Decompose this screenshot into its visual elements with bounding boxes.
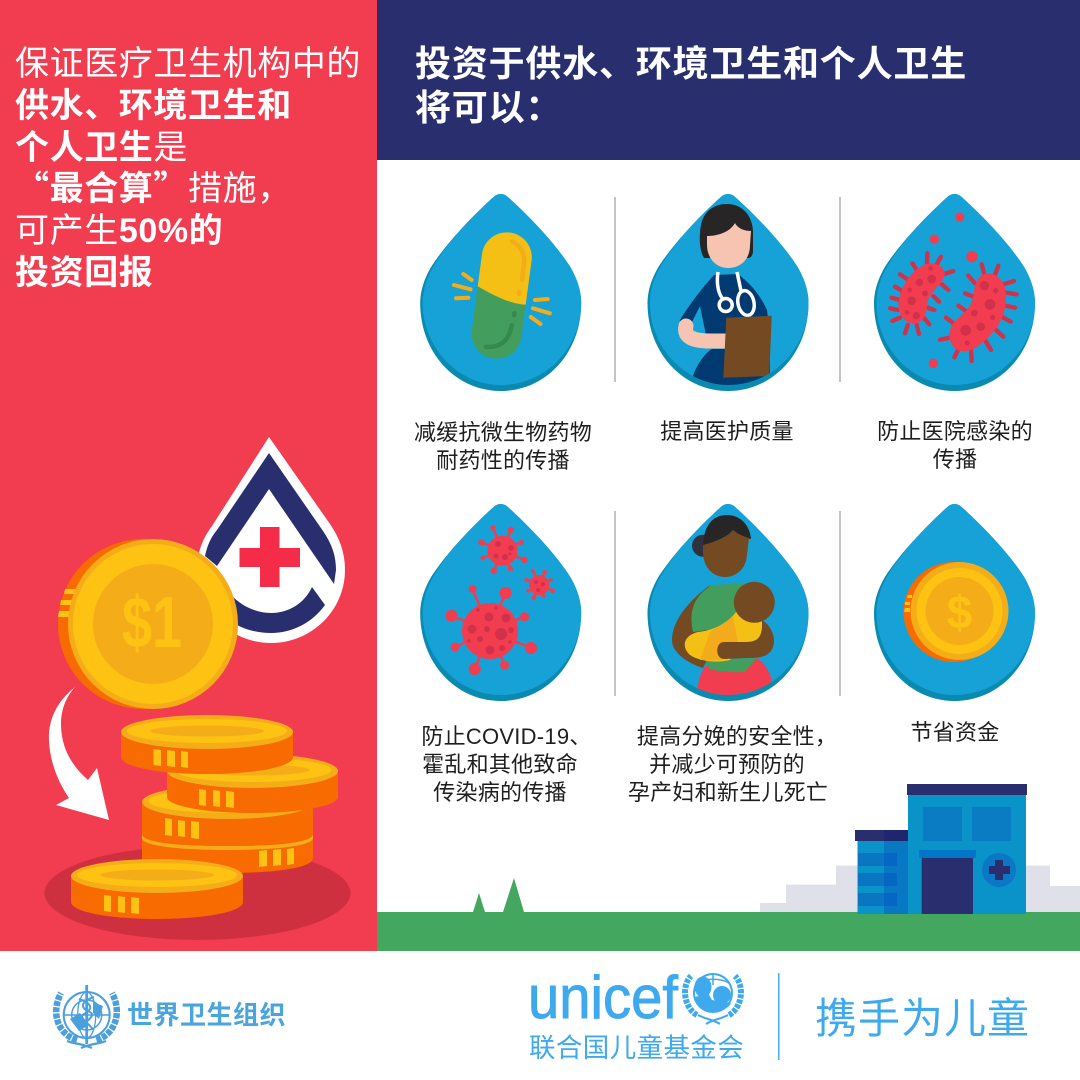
label: COVID-19 and infectious disease bbox=[421, 724, 592, 805]
icon: mother holding baby bbox=[672, 515, 775, 705]
WHO name: 世界卫生组织 bbox=[127, 1000, 286, 1030]
panel: virus droplet bbox=[420, 504, 581, 701]
icon: white curved arrow bbox=[49, 687, 109, 820]
WHO logo bbox=[56, 985, 286, 1048]
right title bbox=[415, 43, 967, 128]
panel: mother and baby droplet bbox=[648, 504, 808, 705]
label: hospital infection bbox=[877, 419, 1033, 472]
divider bbox=[614, 511, 616, 696]
label: antimicrobial resistance: 减缓抗微生物药物 bbox=[414, 420, 592, 445]
panel: pill droplet bbox=[420, 194, 581, 391]
icon: dollar coin bbox=[904, 562, 1008, 662]
panel: bacteria droplet bbox=[874, 194, 1035, 391]
UNICEF name: 联合国儿童基金会 bbox=[529, 1033, 744, 1063]
left heading text: 投资回报 bbox=[15, 254, 153, 292]
label: hospital infection: 传播 bbox=[933, 447, 977, 472]
icon: nurse bbox=[680, 204, 772, 392]
icon: capsule bbox=[469, 229, 535, 362]
right title: 投资于供水、环境卫生和个人卫生 bbox=[415, 43, 967, 84]
left heading text: 可产生50%的 bbox=[15, 212, 223, 250]
icon: big one dollar coin: $1 bbox=[122, 583, 182, 663]
label: COVID-19 and infectious disease: 传染病的传播 bbox=[433, 780, 567, 805]
icon: bacteria bbox=[890, 212, 1017, 368]
left heading text bbox=[15, 45, 361, 292]
icon: UNICEF emblem bbox=[685, 974, 741, 1024]
ground bbox=[377, 912, 1080, 951]
icon: WHO emblem bbox=[56, 985, 117, 1048]
label: COVID-19 and infectious disease: 防止COVID-19、 bbox=[421, 724, 592, 749]
right title: 将可以： bbox=[415, 87, 562, 128]
label: COVID-19 and infectious disease: 霍乱和其他致命 bbox=[422, 752, 578, 777]
footer divider bbox=[778, 973, 780, 1060]
panel: saving money droplet bbox=[874, 504, 1035, 701]
icon: dollar coin: $ bbox=[947, 586, 972, 638]
divider bbox=[839, 511, 841, 696]
illustration: coins, logo and arrow bbox=[44, 437, 350, 940]
label: safer childbirth: 并减少可预防的 bbox=[649, 752, 805, 777]
icon: coin stack bbox=[71, 715, 338, 919]
panel: left red column bbox=[0, 0, 377, 951]
divider bbox=[839, 197, 841, 382]
divider bbox=[614, 197, 616, 382]
label: save money: 节省资金 bbox=[910, 720, 1000, 745]
label: quality of care: 提高医护质量 bbox=[660, 419, 794, 444]
label: safer childbirth: 提高分娩的安全性， bbox=[637, 724, 837, 749]
grass tufts bbox=[473, 878, 524, 912]
left heading text: “最合算”措施， bbox=[15, 161, 292, 210]
label: hospital infection: 防止医院感染的 bbox=[877, 419, 1033, 444]
background skyline steps bbox=[760, 866, 1080, 912]
UNICEF logo bbox=[528, 964, 744, 1063]
icon: hospital building bbox=[855, 784, 1027, 914]
ground shadow bbox=[44, 846, 350, 940]
label: safer childbirth: 孕产妇和新生儿死亡 bbox=[628, 780, 828, 805]
icon: big one dollar coin bbox=[58, 539, 238, 709]
label: antimicrobial resistance bbox=[414, 420, 592, 473]
hospital scene bbox=[377, 784, 1080, 951]
left heading text: 供水、环境卫生和 bbox=[15, 87, 292, 125]
label: antimicrobial resistance: 耐药性的传播 bbox=[436, 448, 570, 473]
icon: water drop logo with red cross bbox=[197, 437, 345, 643]
unicef wordmark: unicef bbox=[528, 964, 678, 1031]
slogan: 携手为儿童 bbox=[815, 995, 1030, 1042]
panel: nurse droplet bbox=[648, 194, 808, 392]
panel: top navy header bbox=[377, 0, 1080, 160]
icon: viruses bbox=[446, 525, 555, 675]
left heading text: 保证医疗卫生机构中的 bbox=[15, 45, 361, 83]
left heading text: 个人卫生是 bbox=[15, 129, 188, 167]
label: safer childbirth bbox=[628, 724, 837, 805]
